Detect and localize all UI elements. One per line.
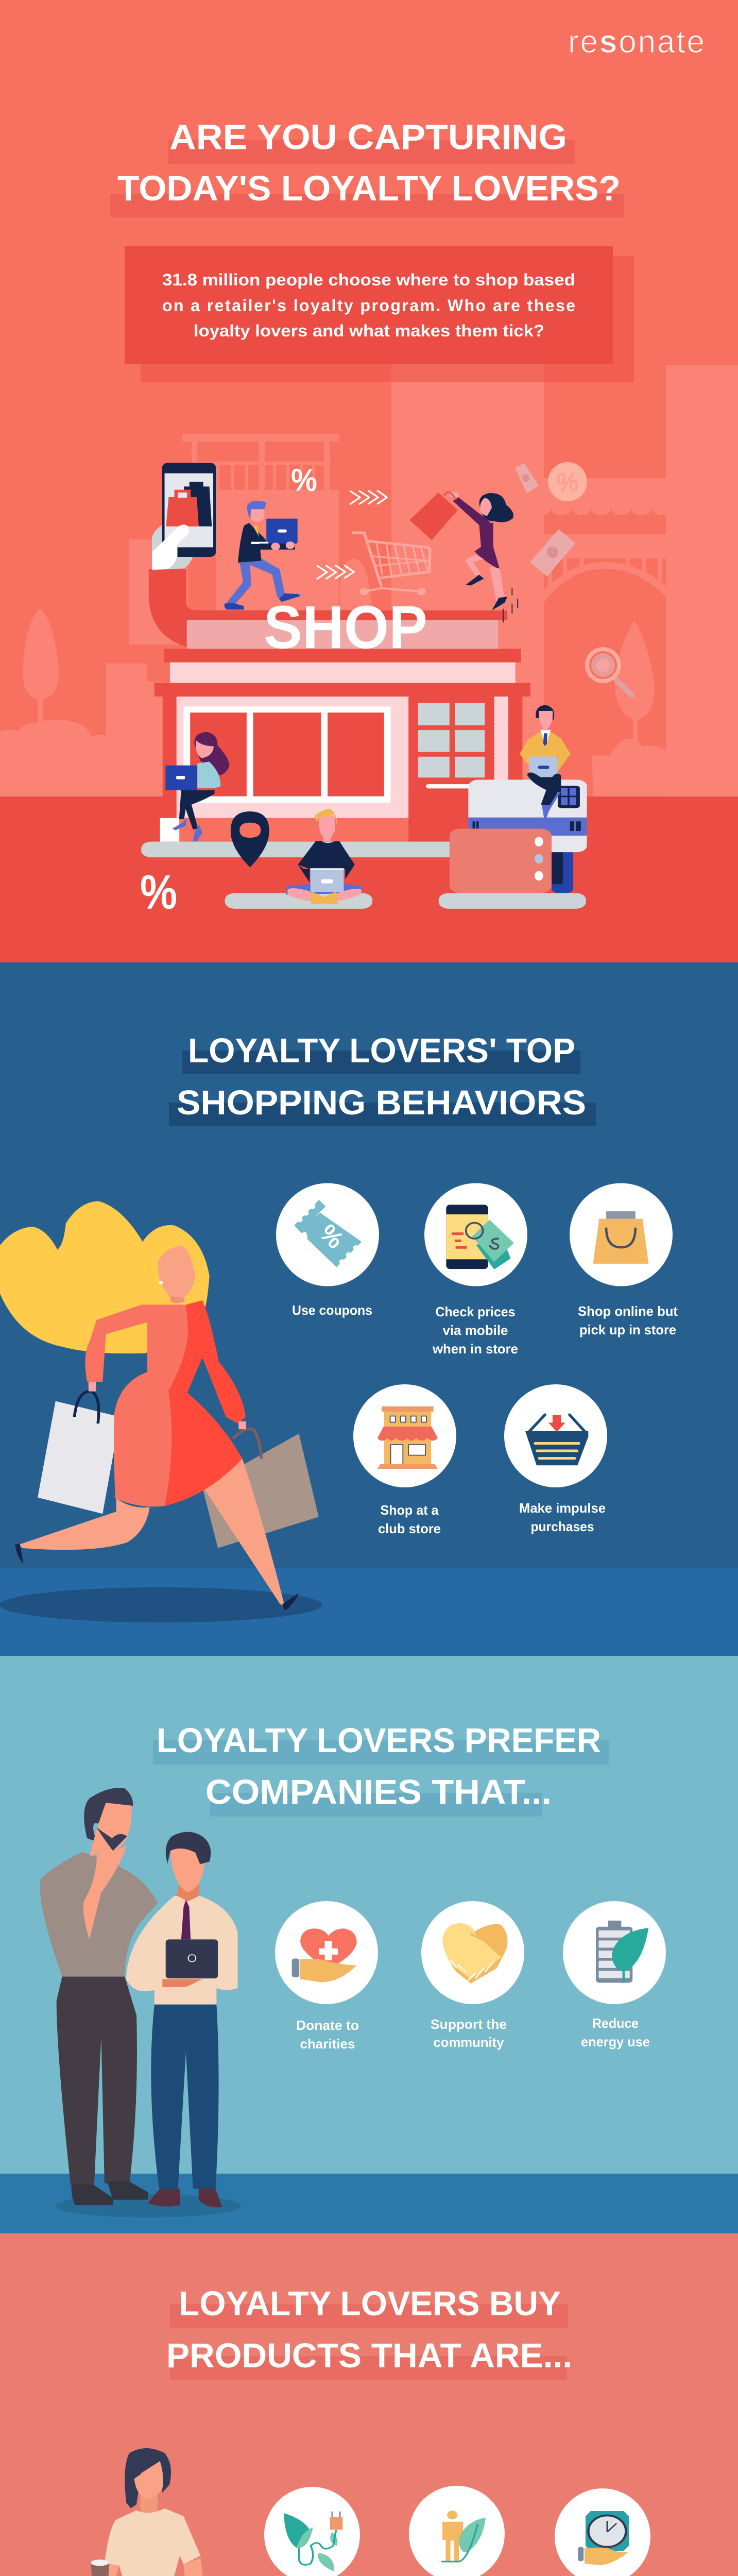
hero backdrop city [0, 364, 738, 796]
intro text box: loyalty lovers and what makes them tick? [194, 321, 544, 340]
heading: LOYALTY LOVERS BUY [179, 2284, 561, 2323]
item: check prices: via mobile [443, 1323, 508, 1338]
item: check prices: Check prices [436, 1304, 515, 1319]
icon: heart in hand [292, 1928, 357, 1982]
icon: phone and price tag [446, 1205, 514, 1269]
shop sign text: SHOP [264, 594, 427, 662]
title: are you capturing: ARE YOU CAPTURING [169, 117, 567, 157]
shop building [141, 569, 530, 857]
item: donate [275, 1901, 378, 2052]
money bills [515, 463, 575, 577]
man seated with laptop [286, 809, 363, 904]
logo: resonate: resonate [568, 24, 705, 60]
item: use coupons: % [314, 1219, 349, 1254]
item: reduce energy: energy use [581, 2034, 650, 2049]
title: are you capturing: TODAY'S LOYALTY LOVERS? [117, 168, 621, 208]
percent sign: % [140, 865, 177, 919]
floor [0, 1568, 738, 1656]
heading: COMPANIES THAT... [205, 1773, 552, 1811]
woman with laptop on window [165, 732, 229, 841]
icon: store [377, 1406, 438, 1469]
item: support community: community [434, 2035, 504, 2050]
item: energy efficient [264, 2487, 367, 2576]
title: are you capturing [110, 117, 624, 217]
intro text box: 31.8 million people choose where to shop based [162, 270, 575, 289]
icon: coupon [294, 1200, 362, 1267]
hero backdrop city: % [291, 463, 317, 498]
icon: map pin [231, 811, 269, 868]
woman with coffee [91, 2448, 212, 2576]
item: donate: charities [300, 2036, 355, 2052]
item: impulse purchases: Make impulse [519, 1500, 606, 1516]
heading: LOYALTY LOVERS PREFER [157, 1721, 601, 1760]
coupon badge: % [556, 468, 579, 497]
heading: SHOPPING BEHAVIORS [177, 1083, 586, 1122]
running woman with bags [0, 1201, 322, 1622]
icon: battery and leaf [596, 1921, 648, 1983]
man carrying laptop [225, 501, 300, 609]
item: shop online [570, 1183, 678, 1337]
item: use coupons [276, 1183, 379, 1318]
section: hero [0, 0, 738, 962]
item: use coupons: Use coupons [292, 1302, 372, 1318]
ground [0, 796, 738, 962]
heading [166, 2284, 572, 2380]
item: family friendly [409, 2486, 509, 2576]
item: support community [421, 1901, 524, 2050]
item: impulse purchases [504, 1384, 607, 1534]
man with tablet on atm [520, 705, 571, 823]
icon: smartphone in hand [152, 463, 216, 570]
heading [153, 1721, 609, 1817]
item: club store: Shop at a [380, 1502, 439, 1518]
woman jumping [450, 492, 518, 622]
icon: leaves and plug [284, 2512, 342, 2571]
item: support community: Support the [431, 2016, 507, 2032]
pavement center [225, 893, 372, 909]
item: impulse purchases: purchases [530, 1519, 594, 1534]
coupon badge [548, 462, 587, 501]
heading [169, 1031, 596, 1126]
item: reduce energy: Reduce [592, 2015, 639, 2031]
floor [0, 2174, 738, 2233]
illustration: shop scene [141, 463, 587, 909]
chevron arrows [317, 491, 387, 579]
icon: person and leaf [441, 2511, 486, 2562]
heading: LOYALTY LOVERS' TOP [188, 1031, 575, 1070]
item: donate: Donate to [296, 2018, 359, 2033]
magnifier [585, 647, 632, 696]
icon: basket [525, 1415, 588, 1465]
section: top shopping behaviors [0, 962, 738, 1656]
item: check prices [424, 1183, 527, 1357]
item: club store [353, 1384, 456, 1536]
red shopping bag [409, 492, 458, 540]
icon: handshake heart [442, 1923, 507, 1984]
item: shop online: pick up in store [579, 1322, 676, 1337]
item: shop online: Shop online but [578, 1303, 678, 1319]
item: club store: club store [378, 1521, 441, 1536]
atm machine [439, 779, 587, 909]
section: products [0, 2233, 738, 2576]
intro text box [125, 246, 634, 382]
icon: shopping bag [593, 1211, 648, 1264]
heading: PRODUCTS THAT ARE... [166, 2336, 572, 2375]
intro text box: on a retailer's loyalty program. Who are these [162, 296, 575, 315]
icon: clock in hand [578, 2511, 629, 2565]
section: prefer companies [0, 1656, 738, 2233]
item: reduce energy [563, 1901, 666, 2049]
shopping cart [352, 533, 430, 594]
item: time saving [555, 2488, 650, 2576]
item: check prices: when in store [432, 1341, 518, 1357]
two men with tablet [40, 1788, 241, 2217]
